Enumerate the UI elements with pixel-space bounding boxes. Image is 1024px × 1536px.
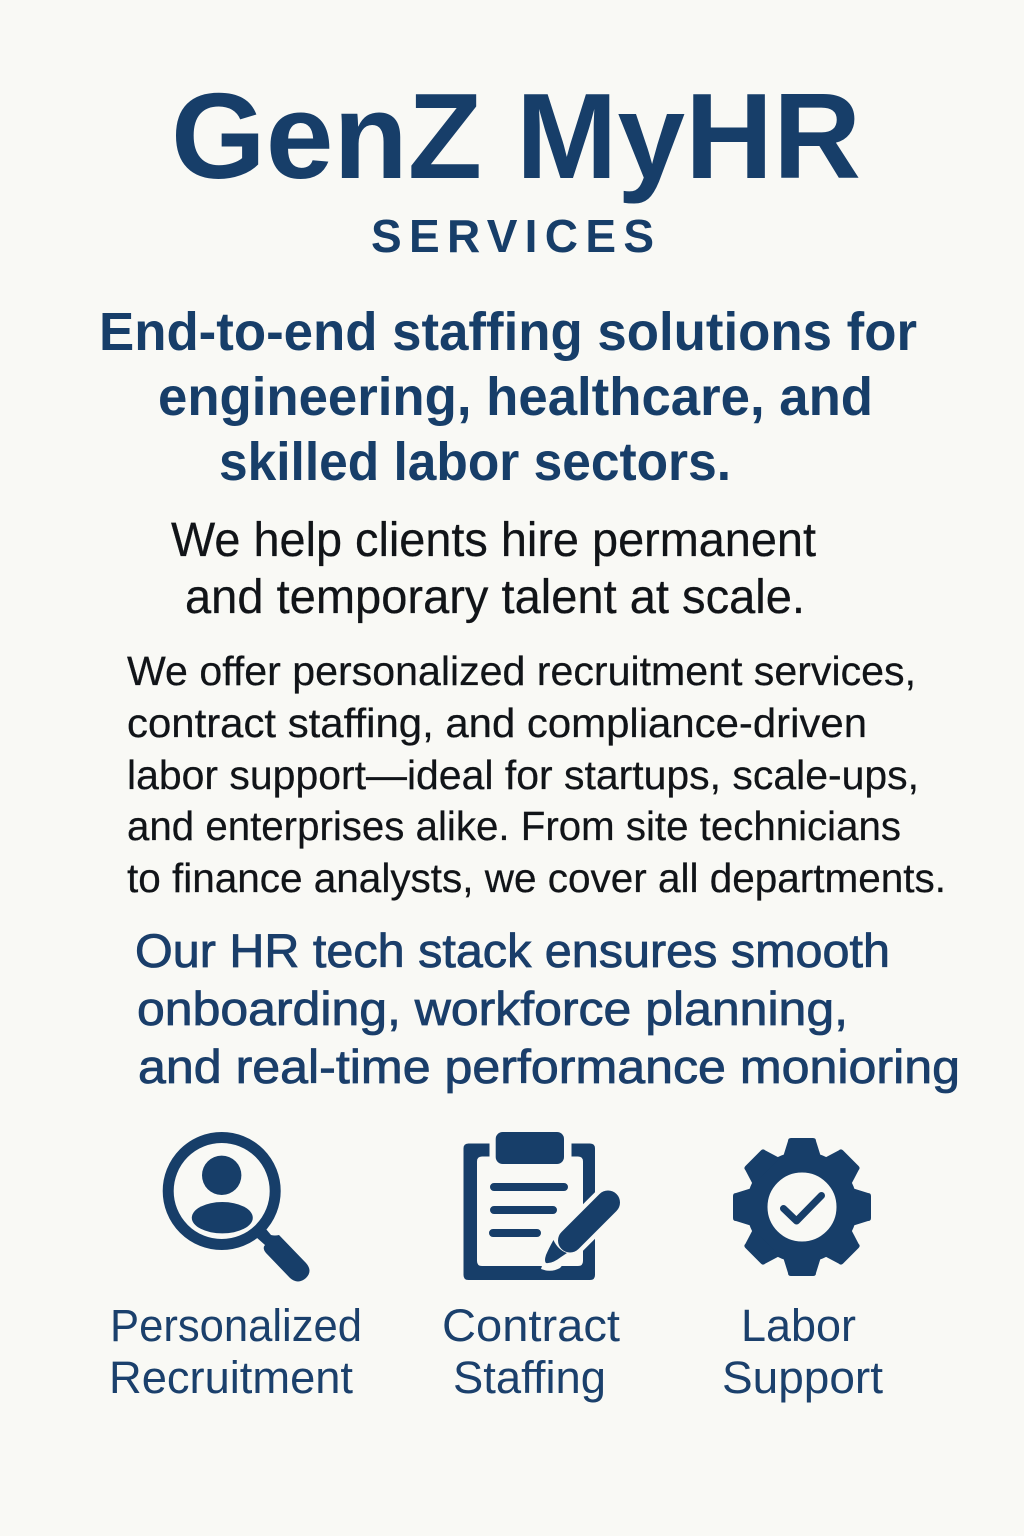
tech stack text block: onboarding, workforce planning, (137, 982, 848, 1035)
description text block: We offer personalized recruitment services, (127, 648, 916, 694)
label: personalized recruitment (109, 1300, 362, 1403)
label: personalized recruitment: Personalized (110, 1300, 362, 1351)
headline text block (99, 302, 917, 492)
label: personalized recruitment: Recruitment (109, 1352, 354, 1403)
description text block: to finance analysts, we cover all departments. (127, 855, 946, 901)
icon: clipboard with pen (464, 1132, 608, 1280)
headline text block: engineering, healthcare, and (158, 367, 873, 427)
description text block (127, 648, 946, 901)
headline text block: skilled labor sectors. (219, 432, 731, 492)
icon: magnifying glass with person (168, 1138, 310, 1282)
service: personalized recruitment (109, 1138, 362, 1403)
subtitle: services: SERVICES (371, 210, 654, 262)
icon: gear with check mark (733, 1138, 871, 1276)
label: labor support: Labor (741, 1300, 856, 1351)
description text block: labor support—ideal for startups, scale-ups, (127, 752, 919, 798)
headline text block: End-to-end staffing solutions for (99, 302, 917, 362)
tech stack text block (135, 924, 960, 1093)
intro text block (171, 514, 816, 624)
tech stack text block: Our HR tech stack ensures smooth (135, 924, 890, 977)
label: labor support (722, 1300, 883, 1403)
tech stack text block: and real-time performance monioring (138, 1040, 960, 1093)
label: contract staffing: Staffing (453, 1352, 606, 1403)
intro text block: and temporary talent at scale. (185, 571, 805, 624)
label: contract staffing (442, 1300, 621, 1403)
label: contract staffing: Contract (442, 1300, 621, 1351)
intro text block: We help clients hire permanent (171, 514, 816, 567)
service: contract staffing (442, 1132, 621, 1403)
description text block: and enterprises alike. From site technicians (127, 803, 901, 849)
service: labor support (722, 1138, 883, 1403)
label: labor support: Support (722, 1352, 883, 1403)
title: GenZ MyHR (171, 68, 861, 204)
description text block: contract staffing, and compliance-driven (127, 700, 867, 746)
